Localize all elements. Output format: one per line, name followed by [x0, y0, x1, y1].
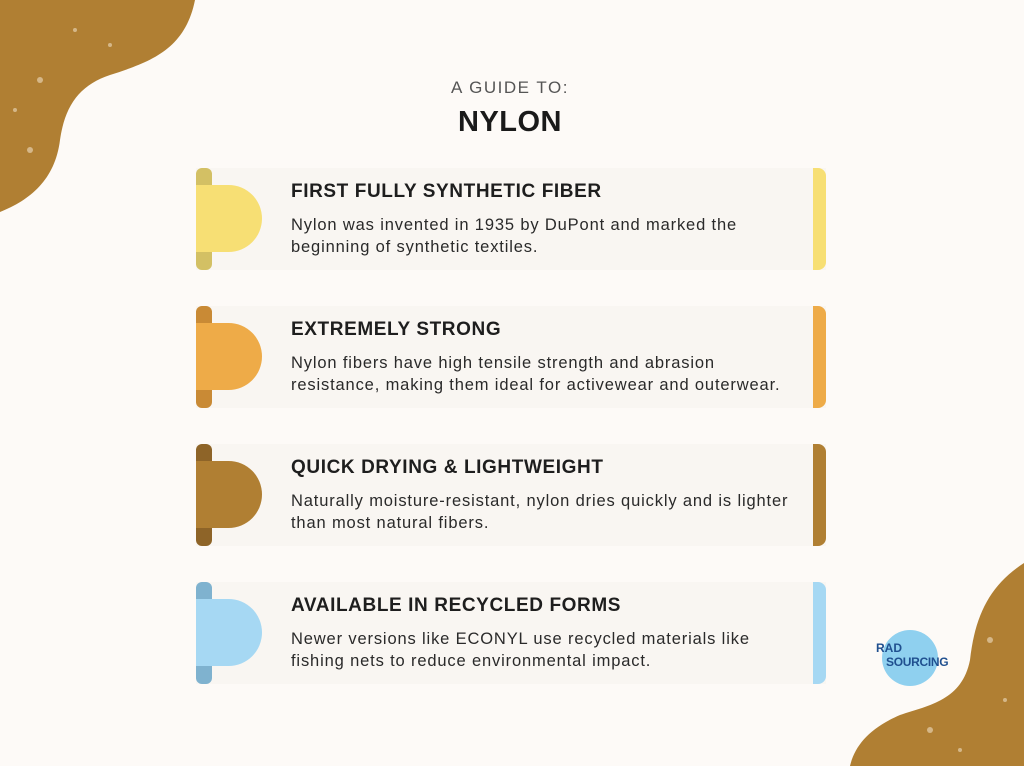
panel: extremely strong: Nylon fibers have high tensile strength and abrasion resistance, making them ideal for activewear and outerwear.: [291, 354, 780, 394]
subtitle: A GUIDE TO:: [451, 78, 569, 97]
panel: extremely strong: EXTREMELY STRONG: [291, 319, 501, 340]
logo: rad sourcing: SOURCING: [886, 655, 948, 669]
panel: recycled forms: [196, 582, 826, 684]
panel: recycled forms: Newer versions like ECONYL use recycled materials like fishing nets to reduce environmental impact.: [291, 630, 750, 670]
panel: extremely strong: [196, 306, 826, 408]
panel: first fully synthetic fiber: Nylon was invented in 1935 by DuPont and marked the beginning of synthetic textiles.: [291, 216, 737, 256]
title: NYLON: [458, 106, 562, 138]
panel: recycled forms: AVAILABLE IN RECYCLED FORMS: [291, 595, 621, 616]
panel: first fully synthetic fiber: [196, 168, 826, 270]
panel: quick drying: QUICK DRYING & LIGHTWEIGHT: [291, 457, 604, 478]
logo: rad sourcing: [876, 630, 948, 686]
panel: quick drying: [196, 444, 826, 546]
panel: quick drying: Naturally moisture-resistant, nylon dries quickly and is lighter than most natural fibers.: [291, 492, 788, 532]
panel: first fully synthetic fiber: FIRST FULLY SYNTHETIC FIBER: [291, 181, 602, 202]
logo: rad sourcing: RAD: [876, 641, 902, 655]
